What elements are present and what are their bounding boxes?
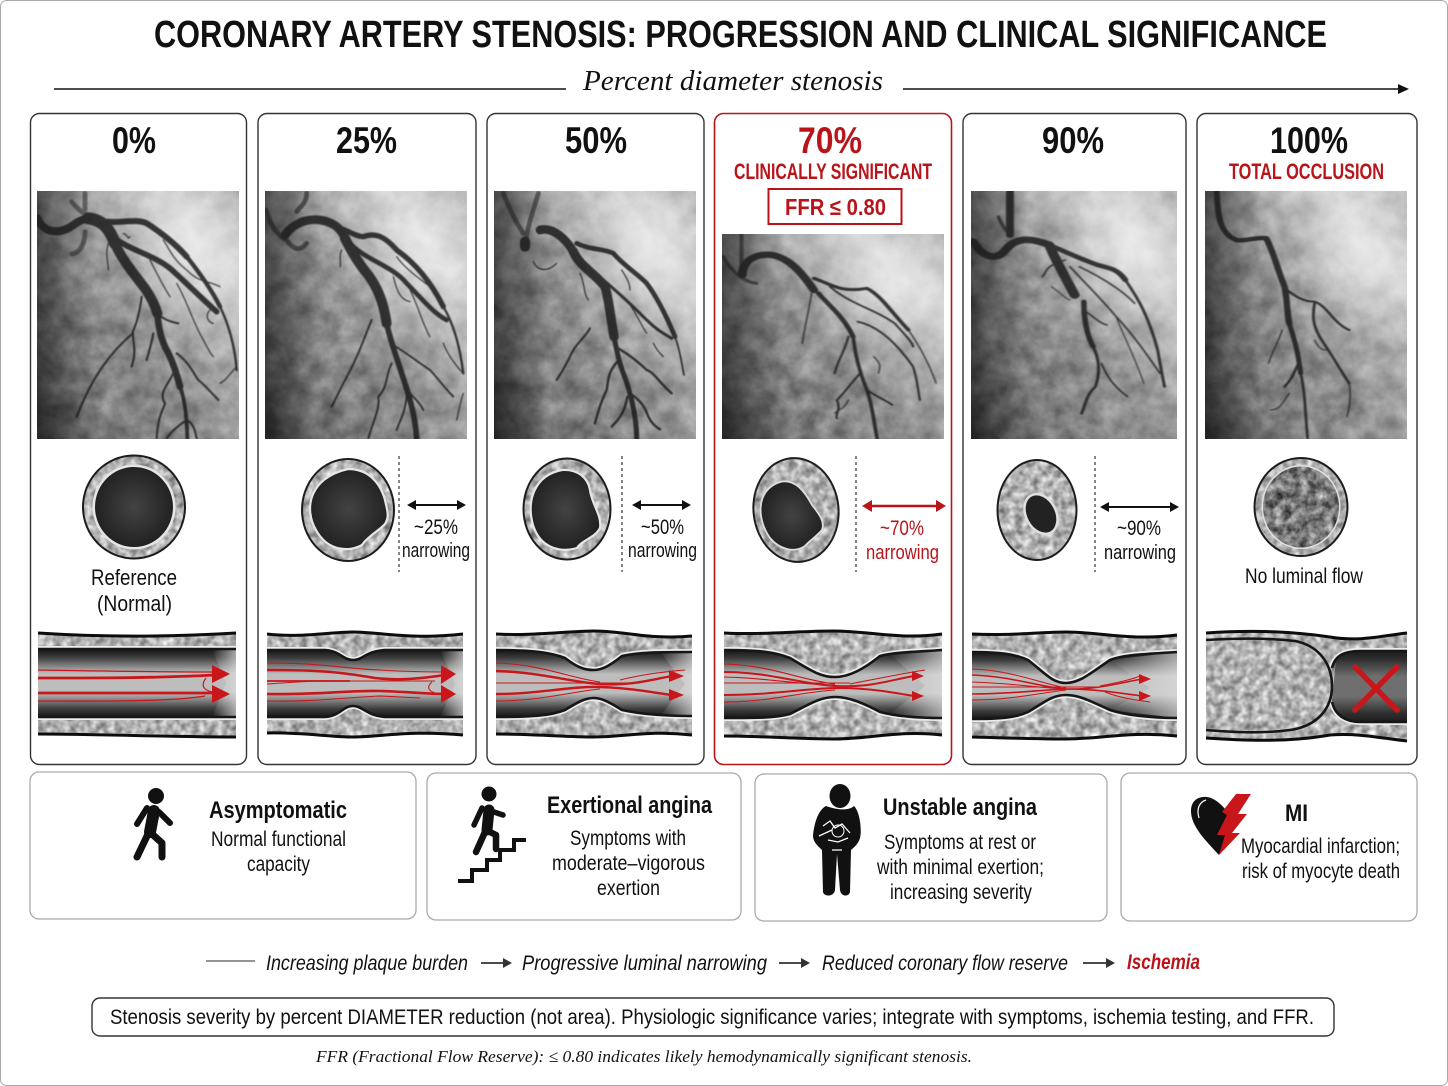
indicator: 90% narrowing	[1095, 456, 1179, 572]
note box: Stenosis severity by percent DIAMETER reduction (not area). Physiologic significance varies; integrate with symptoms, ischemia testing, and FFR.	[110, 1006, 1314, 1029]
indicator: 50% narrowing	[622, 456, 697, 572]
indicator: 90% narrowing: ~90%	[1117, 517, 1161, 540]
symptom box: exertional angina	[427, 773, 741, 920]
text: unstable angina: Unstable angina	[883, 794, 1038, 821]
pathway: plaque to ischemia: Increasing plaque burden	[266, 952, 468, 975]
panel: 70% clinically significant	[714, 114, 952, 764]
text: unstable angina: Symptoms at rest or	[884, 831, 1036, 854]
text: unstable angina: increasing severity	[890, 881, 1032, 904]
angiogram: 25%	[265, 191, 467, 439]
flow arrows	[972, 669, 1151, 702]
footnote: FFR definition: FFR (Fractional Flow Reserve): ≤ 0.80 indicates likely hemodynamically significant stenosis.	[315, 1047, 972, 1066]
text: MI	[1241, 800, 1400, 883]
heading: 25%: 25%	[336, 120, 397, 161]
indicator: 25% narrowing: ~25%	[414, 516, 458, 539]
angiogram: normal	[37, 191, 239, 439]
longitudinal vessel: 50%	[496, 631, 692, 737]
axis: percent diameter stenosis	[54, 65, 1409, 97]
panel: 25%	[258, 114, 476, 764]
text: exertional angina: Exertional angina	[547, 792, 713, 819]
cross-section: 50%	[522, 458, 612, 560]
longitudinal vessel: occlusion	[1206, 631, 1407, 741]
longitudinal vessel: 90%	[972, 632, 1177, 739]
text: MI: MI	[1285, 800, 1308, 827]
icon: walking person	[137, 788, 170, 857]
icon: person clutching chest	[813, 784, 861, 896]
cross-section: 70%	[747, 453, 845, 567]
pathway: plaque to ischemia: Progressive luminal narrowing	[522, 952, 767, 975]
heading: 50%: 50%	[565, 120, 627, 161]
pathway: plaque to ischemia: Ischemia	[1127, 951, 1200, 974]
indicator: 25% narrowing: narrowing	[402, 540, 470, 562]
longitudinal vessel: 70%	[724, 631, 942, 739]
text: asymptomatic: capacity	[247, 853, 310, 876]
text: asymptomatic	[209, 797, 347, 876]
text: asymptomatic: Normal functional	[211, 828, 346, 851]
heading: 90%: 90%	[1042, 120, 1104, 161]
heading: 70%: 70%	[798, 120, 862, 161]
axis: percent diameter stenosis: Percent diameter stenosis	[582, 65, 883, 97]
text: exertional angina: Symptoms with	[570, 827, 686, 850]
icon: red X no flow	[1355, 667, 1397, 710]
pathway: plaque to ischemia: Reduced coronary flow reserve	[822, 952, 1068, 975]
indicator: 90% narrowing: narrowing	[1104, 542, 1176, 564]
panel: 100% total occlusion	[1197, 114, 1417, 764]
indicator: 25% narrowing	[399, 456, 470, 572]
symptom box: unstable angina	[755, 774, 1107, 921]
flow arrows	[267, 663, 456, 703]
text: exertional angina: moderate–vigorous	[552, 852, 705, 875]
panel: 90%	[963, 114, 1186, 764]
badge: FFR threshold: FFR ≤ 0.80	[785, 194, 886, 220]
heading: 100%: 100%	[1270, 120, 1348, 161]
flow arrows	[724, 664, 925, 702]
longitudinal vessel: 25%	[267, 632, 463, 737]
label: no luminal flow: No luminal flow	[1245, 565, 1364, 588]
text: MI: risk of myocyte death	[1242, 860, 1400, 883]
angiogram: 70%	[722, 234, 944, 439]
flow arrows	[496, 663, 685, 701]
label: reference normal	[91, 565, 177, 616]
label: reference normal: Reference	[91, 565, 177, 590]
text: exertional angina: exertion	[597, 877, 660, 900]
pathway: plaque to ischemia	[206, 951, 1200, 975]
text: MI: Myocardial infarction;	[1241, 835, 1400, 858]
angiogram: 90%	[971, 191, 1177, 439]
note box	[92, 998, 1334, 1036]
indicator: 70% narrowing: ~70%	[880, 517, 924, 540]
angiogram: 100%	[1205, 191, 1407, 439]
text: exertional angina	[547, 792, 713, 900]
cross-section: occluded	[1254, 457, 1348, 557]
label: reference normal: (Normal)	[97, 591, 172, 616]
cross-section: 25%	[301, 458, 395, 562]
badge: FFR threshold	[768, 189, 902, 224]
symptom box: asymptomatic	[30, 772, 416, 919]
text: asymptomatic: Asymptomatic	[209, 797, 347, 824]
heading: 0%: 0%	[112, 120, 156, 161]
flow arrows	[38, 665, 230, 703]
icon: person climbing stairs	[458, 786, 526, 881]
label: clinically significant: CLINICALLY SIGNIFICANT	[734, 159, 932, 184]
angiogram: 50%	[494, 191, 696, 439]
panel: 0%	[30, 114, 246, 764]
longitudinal vessel: normal flow	[38, 633, 236, 738]
text: unstable angina	[876, 794, 1044, 904]
cross-section: 90%	[996, 459, 1078, 561]
panel: 50%	[487, 114, 704, 764]
icon: broken heart with lightning bolt	[1191, 794, 1251, 855]
cross-section: normal	[82, 454, 186, 560]
indicator: 70% narrowing: narrowing	[866, 542, 939, 564]
symptom box: MI	[1121, 773, 1417, 921]
indicator: 50% narrowing: narrowing	[628, 540, 697, 562]
text: unstable angina: with minimal exertion;	[876, 856, 1044, 879]
indicator: 70% narrowing	[856, 456, 946, 572]
indicator: 50% narrowing: ~50%	[641, 516, 684, 539]
label: total occlusion: TOTAL OCCLUSION	[1229, 159, 1384, 184]
